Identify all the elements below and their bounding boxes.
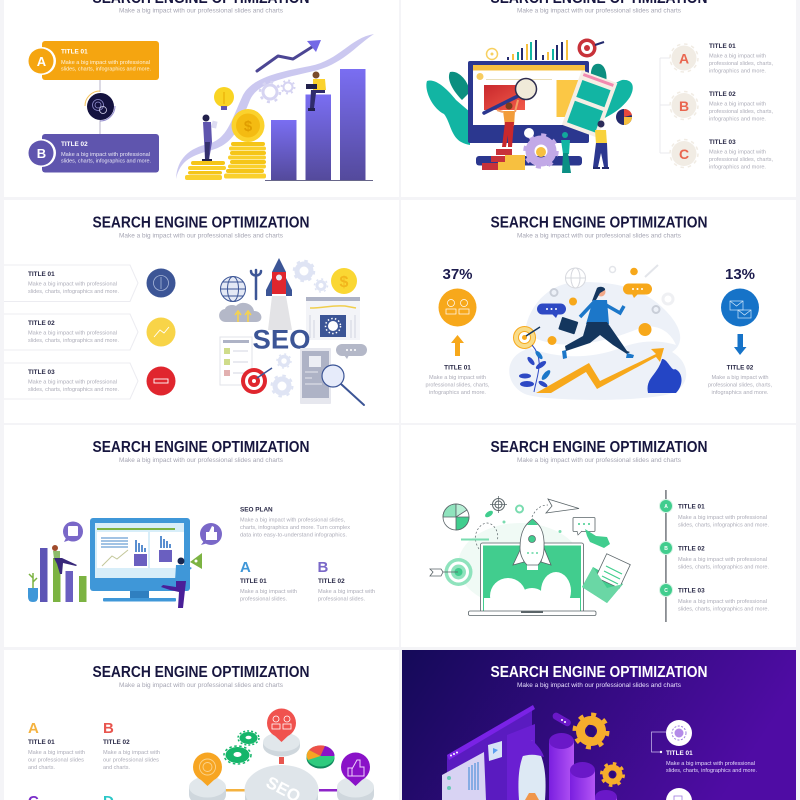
item: title 03: slides, charts, infographics and more. (28, 387, 119, 393)
card: title 02: slides, charts, infographics and more. (61, 158, 151, 164)
card: title 01: Make a big impact with professional (61, 60, 150, 66)
item: title 01 (660, 500, 769, 528)
item: title 01 (4, 265, 176, 302)
illustration: pale green blob (458, 523, 582, 607)
stat: 37 percent: 37% (442, 266, 473, 283)
subheading: Make a big impact with our professional slides and charts (119, 683, 283, 689)
icon: target with arrow (430, 558, 472, 586)
item: A title 01: A (240, 559, 251, 576)
item: title 03: Make a big impact with professional (678, 599, 767, 605)
item: title 03: C (679, 146, 689, 162)
icon: crosshair with drone (484, 496, 562, 533)
subheading: Make a big impact with our professional slides and charts (119, 458, 283, 464)
illustration: connectors (226, 757, 337, 792)
item: A title 01: our professional slides (28, 758, 85, 764)
subheading: Make a big impact with our professional slides and charts (517, 8, 681, 14)
icon: green gears (224, 731, 259, 764)
item: title 01: professional slides, charts, (709, 61, 773, 67)
item: title 03: Make a big impact with (709, 150, 766, 156)
timeline (660, 490, 769, 622)
bar chart (265, 69, 373, 181)
timeline line (660, 58, 670, 153)
item: title 01: slides, charts, infographics and more. (28, 289, 119, 295)
illustration: purple cylinders (549, 733, 617, 800)
item: A title 01: Make a big impact with (240, 589, 297, 595)
illustration: target (514, 326, 540, 348)
text: SEO plan: charts, infographics and more. Turn complex (240, 525, 351, 531)
icon: gears top (294, 261, 328, 292)
item: title 02: infographics and more. (709, 116, 766, 122)
item: A title 01: Make a big impact with (28, 750, 85, 756)
item: B title 02: Make a big impact with (318, 589, 375, 595)
illustration: leaves (426, 64, 633, 145)
icon: speech bubble left (63, 522, 83, 542)
icon: rocket with trail (266, 258, 292, 330)
icon: globe (220, 276, 246, 302)
stat: 13 percent (708, 266, 772, 396)
stat: 13 percent: 13% (725, 266, 755, 283)
item: title 01: Make a big impact with professional (666, 761, 755, 767)
illustration: rising swoosh (176, 34, 374, 179)
icon: coin stacks (185, 109, 266, 180)
figure: running woman (558, 287, 634, 359)
icon: orange pin (193, 752, 222, 786)
card: title 01: slides, charts, infographics and more. (61, 66, 151, 72)
item: title 01: Make a big impact with professional (678, 515, 767, 521)
icon: connector badge (85, 80, 115, 134)
text: SEO plan: Make a big impact with professional slides, (240, 518, 345, 524)
illustration: laptop (468, 543, 596, 616)
item: title 02: TITLE 02 (678, 546, 705, 552)
item: A title 01 (28, 720, 85, 771)
icon: chat bubble (336, 344, 367, 359)
illustration: central SEO disk (244, 765, 318, 800)
item: title 02 (660, 542, 769, 570)
item: second badge (666, 788, 692, 800)
item: title 01 (670, 43, 773, 74)
icon: coin stacks: $ (244, 118, 253, 135)
item: title 01: TITLE 01 (709, 43, 736, 50)
item: title 01: TITLE 01 (28, 271, 55, 278)
icon: magnifier (322, 365, 364, 405)
item: title 03: TITLE 03 (28, 369, 55, 376)
item: title 01: TITLE 01 (678, 504, 705, 510)
icon: dashed arc and dash (461, 505, 548, 549)
heading: SEARCH ENGINE OPTIMIZATION (92, 439, 310, 456)
illustration: monitor (468, 61, 589, 143)
item: title 01: Make a big impact with (709, 54, 766, 60)
item: B title 02: our professional slides (103, 758, 160, 764)
item: title 01: Make a big impact with professional (28, 282, 117, 288)
figure: man on coins (202, 114, 218, 161)
item: title 02: professional slides, charts, (709, 109, 773, 115)
stat: 37 percent: Make a big impact with (429, 375, 486, 381)
item: title 02 (670, 91, 773, 122)
illustration: isometric browser (442, 705, 535, 800)
stat: 13 percent: TITLE 02 (727, 364, 754, 372)
item: B title 02: TITLE 02 (318, 578, 345, 585)
illustration: rocket (518, 740, 546, 800)
stat: 37 percent: infographics and more. (429, 390, 486, 396)
item: title 03 (4, 363, 176, 399)
item: B title 02: professional slides. (318, 596, 365, 602)
card: title 02: Make a big impact with professional (61, 152, 150, 158)
item: A title 01: TITLE 01 (240, 578, 267, 585)
bar chart (28, 548, 86, 602)
card: title 02: B (37, 146, 46, 161)
card: title 02: TITLE 02 (61, 141, 88, 148)
item: title 03: TITLE 03 (709, 139, 736, 146)
icon: cloud upload (219, 303, 261, 322)
icon: target (241, 368, 272, 394)
item: B title 02 (318, 559, 375, 602)
stat: 13 percent: infographics and more. (712, 390, 768, 396)
panel: slide 1 growth chart (4, 0, 399, 197)
item: title 01: A (664, 504, 668, 510)
subheading: Make a big impact with our professional slides and charts (119, 8, 283, 14)
panel: slide 8 dark isometric (402, 650, 796, 800)
item: title 01: A (679, 50, 689, 66)
arrow: rising zigzag (536, 348, 664, 393)
figure: woman on bar (306, 72, 326, 111)
icon: wrench (251, 270, 261, 299)
item: A title 01 (240, 559, 297, 602)
panel: slide 7 isometric network (4, 650, 399, 800)
figure: woman with pencil (497, 100, 518, 147)
item: title 03: C (664, 588, 668, 594)
item: A title 01: TITLE 01 (28, 739, 55, 746)
icon: thumbs up bubble (200, 523, 222, 545)
item: title 02: Make a big impact with (709, 102, 766, 108)
subheading: Make a big impact with our professional slides and charts (517, 234, 681, 240)
card: title 02 (28, 134, 159, 172)
icon: checklist (220, 337, 252, 385)
illustration: teal card (562, 70, 617, 138)
icon: browser window (306, 297, 360, 340)
item: title 03: TITLE 03 (678, 588, 705, 594)
stat: 13 percent: Make a big impact with (712, 375, 769, 381)
item: title 02: TITLE 02 (28, 320, 55, 327)
subheading: Make a big impact with our professional slides and charts (517, 683, 681, 689)
item: title 01 (652, 720, 757, 774)
icon: phone with profile (300, 348, 331, 404)
item: title 01: infographics and more. (709, 68, 766, 74)
illustration: background icons (548, 265, 673, 345)
item: title 01: slides, charts, infographics and more. (666, 768, 757, 774)
item: A title 01: and charts. (28, 765, 55, 771)
illustration: plants (519, 345, 682, 393)
item: title 02: Make a big impact with professional (678, 557, 767, 563)
icon: pie chart (443, 504, 469, 530)
panel: slide 4 percentages (401, 200, 796, 423)
figure: woman in teal (561, 132, 571, 173)
stat: 37 percent (426, 266, 490, 396)
panel: slide 2 website analytics (401, 0, 796, 197)
heading: SEARCH ENGINE OPTIMIZATION (92, 664, 310, 681)
illustration: chat pill (551, 711, 572, 727)
item: B title 02: Make a big impact with (103, 750, 160, 756)
item: title 03: slides, charts, infographics and more. (678, 606, 769, 612)
item: title 02: slides, charts, infographics and more. (678, 564, 769, 570)
icon: SEO wordmark: SEO (252, 324, 310, 354)
subheading: Make a big impact with our professional slides and charts (119, 234, 283, 240)
heading: SEARCH ENGINE OPTIMIZATION (490, 664, 708, 681)
illustration: background blob (509, 282, 686, 400)
icon: light bulb (214, 87, 234, 110)
arrow: growth trend (257, 40, 321, 71)
icon: gears (260, 80, 294, 102)
panel: slide 5 SEO plan (4, 425, 399, 647)
illustration: pie chart (616, 109, 632, 125)
item: title 02: B (679, 98, 689, 114)
item: B title 02: B (318, 559, 328, 576)
illustration: stairs and gear (476, 128, 582, 170)
heading: SEARCH ENGINE OPTIMIZATION (92, 214, 310, 232)
item: title 02: Make a big impact with professional (28, 330, 117, 336)
item: title 02: B (664, 546, 668, 552)
icon: orange gears (574, 714, 624, 786)
card: title 01: A (37, 54, 47, 69)
illustration: monitor with charts (90, 518, 190, 602)
icon: dollar coin: $ (340, 274, 349, 291)
item: B title 02 (103, 720, 160, 771)
text: SEO plan: SEO PLAN (240, 506, 273, 514)
illustration: platform disks (189, 732, 374, 800)
item: B title 02: B (103, 720, 114, 737)
item: title 02: TITLE 02 (709, 91, 736, 98)
item: title 03: professional slides, charts, (709, 157, 773, 163)
item: A title 01: professional slides. (240, 596, 287, 602)
icon: envelope with letter (582, 554, 630, 603)
stat: 13 percent: professional slides, charts, (708, 382, 772, 388)
heading: SEARCH ENGINE OPTIMIZATION (490, 214, 708, 232)
illustration: bar sparkline and target (486, 38, 604, 60)
item: title 01: slides, charts, infographics and more. (678, 522, 769, 528)
icon: paper plane (546, 499, 579, 513)
item: title 03 (670, 139, 773, 170)
figure: woman with megaphone (161, 553, 202, 608)
stat: 37 percent: TITLE 01 (444, 364, 471, 372)
heading: SEARCH ENGINE OPTIMIZATION (490, 439, 708, 456)
illustration: rocket (513, 519, 551, 570)
item: title 01: TITLE 01 (666, 750, 693, 757)
item: title 03: infographics and more. (709, 164, 766, 170)
figure: woman on bars (52, 545, 77, 574)
icon: chat with pointer hand (573, 518, 610, 548)
illustration: speech bubbles (537, 284, 652, 318)
stat: 37 percent: professional slides, charts, (426, 382, 490, 388)
illustration: magnifier (484, 78, 536, 113)
panel: slide 6 rocket launch (401, 425, 796, 647)
text: SEO plan: data into easy-to-understand infographics. (240, 532, 347, 538)
item: B title 02: and charts. (103, 765, 130, 771)
item: title 02 (4, 314, 176, 350)
panel: slide 3 SEO icons (4, 200, 399, 423)
item: title 03: Make a big impact with professional (28, 380, 117, 386)
icon: gears bottom (272, 354, 292, 396)
text: SEO plan (240, 506, 351, 538)
icon: dollar coin (331, 268, 357, 294)
subheading: Make a big impact with our professional slides and charts (517, 458, 681, 464)
icon: red pin (267, 708, 296, 742)
figure: man with card (593, 120, 609, 169)
item: A title 01: A (28, 720, 39, 737)
item: B title 02: TITLE 02 (103, 739, 130, 746)
item: title 02: slides, charts, infographics and more. (28, 338, 119, 344)
icon: isometric pie (306, 745, 335, 768)
card: title 01 (28, 41, 159, 80)
card: title 01: TITLE 01 (61, 48, 88, 56)
icon: purple pin (341, 752, 370, 786)
item: title 03 (660, 584, 769, 612)
